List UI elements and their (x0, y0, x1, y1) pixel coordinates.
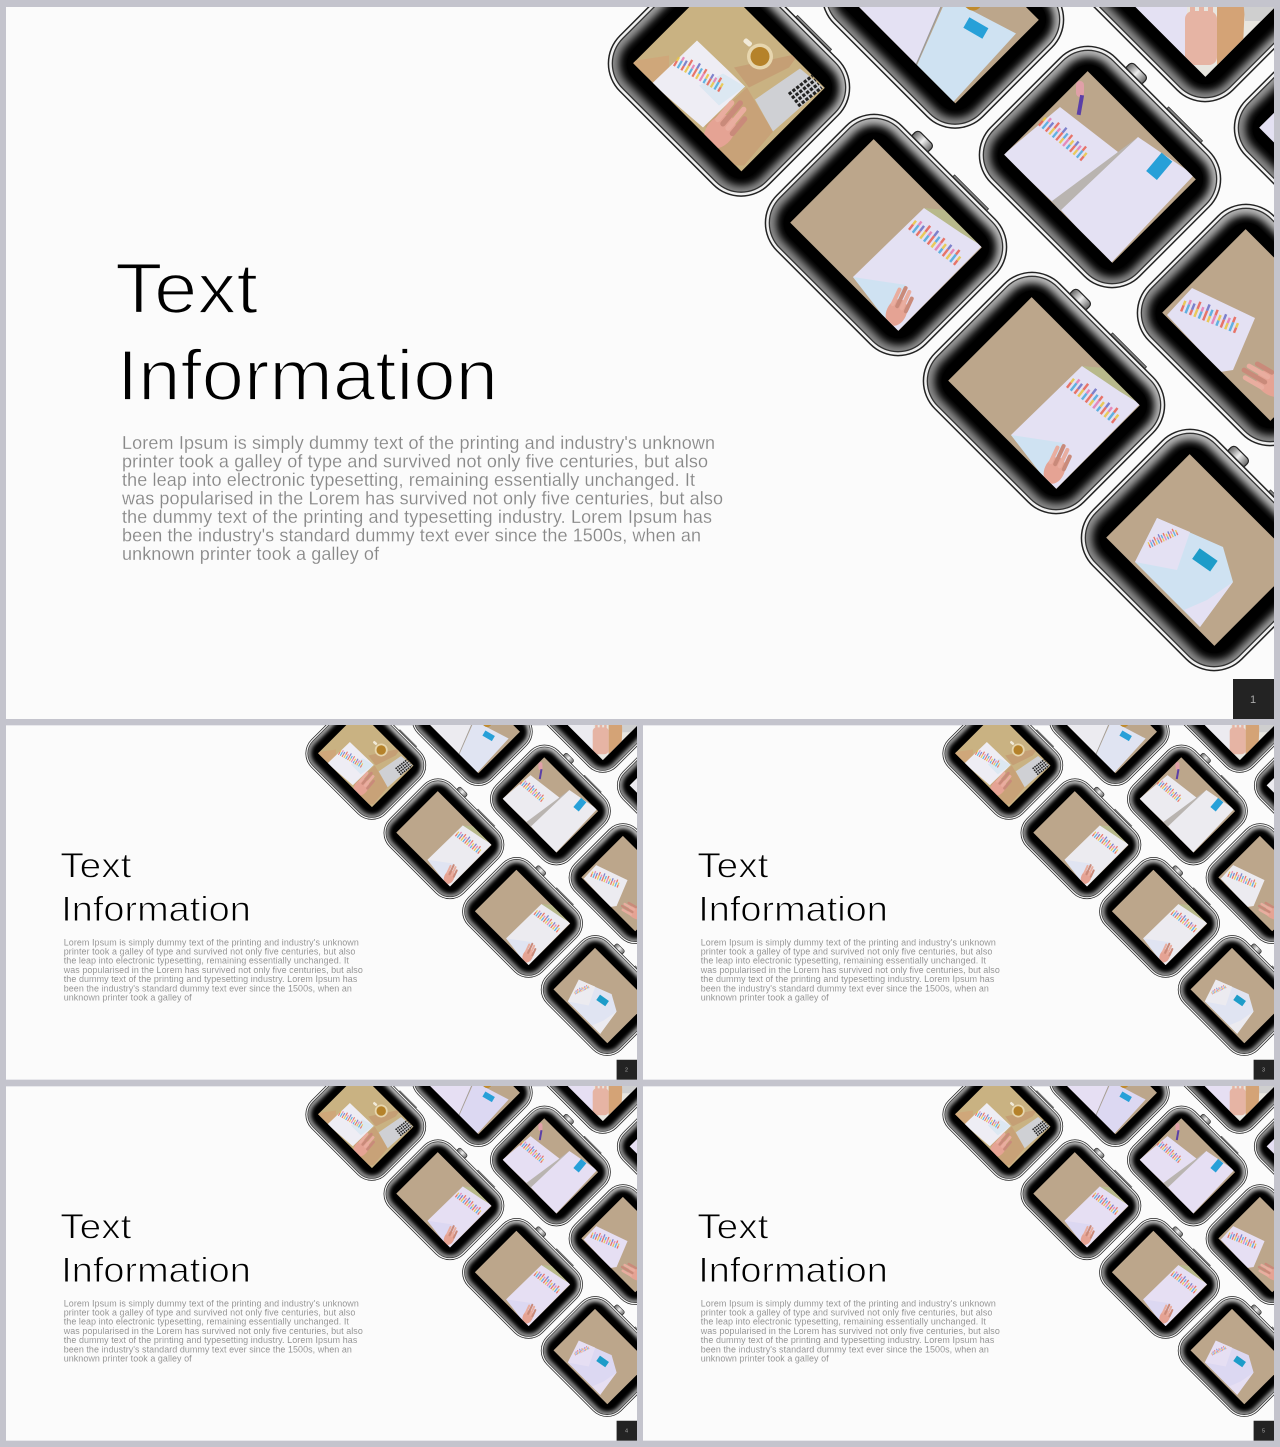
image: grid of tilted smartwatches (934, 641, 1280, 1064)
body text (700, 937, 1000, 1003)
page number: 5 (1262, 1429, 1265, 1435)
body text: the leap into electronic typesetting, remaining essentially unchanged. It (701, 1317, 986, 1327)
body text: the dummy text of the printing and typesetting industry. Lorem Ipsum has (701, 1335, 995, 1345)
image: grid of tilted smartwatches (934, 1002, 1280, 1425)
title: Information (117, 337, 498, 416)
body text: the dummy text of the printing and typesetting industry. Lorem Ipsum has (64, 974, 358, 984)
title: Information (61, 1251, 251, 1290)
body text: printer took a galley of type and survived not only five centuries, but also (64, 947, 355, 957)
body text (63, 937, 363, 1003)
body text: the leap into electronic typesetting, remaining essentially unchanged. It (701, 956, 986, 966)
body text: was popularised in the Lorem has survived not only five centuries, but also (63, 1326, 363, 1336)
body text: the dummy text of the printing and typesetting industry. Lorem Ipsum has (64, 1335, 358, 1345)
body text: was popularised in the Lorem has survived not only five centuries, but also (700, 965, 1000, 975)
body text: was popularised in the Lorem has survived not only five centuries, but also (700, 1326, 1000, 1336)
title (697, 847, 888, 929)
image: grid of tilted smartwatches (297, 641, 749, 1064)
body text: the dummy text of the printing and typesetting industry. Lorem Ipsum has (122, 507, 712, 527)
panel: slide 4 (6, 1086, 637, 1441)
body text (700, 1298, 1000, 1364)
body text (63, 1298, 363, 1364)
page number (617, 1060, 637, 1080)
body text: was popularised in the Lorem has survived not only five centuries, but also (63, 965, 363, 975)
body text: unknown printer took a galley of (701, 1354, 829, 1364)
title: Text (697, 847, 769, 886)
body text: the leap into electronic typesetting, remaining essentially unchanged. It (122, 470, 695, 490)
body text: unknown printer took a galley of (64, 993, 192, 1003)
title (60, 847, 251, 929)
page number: 3 (1262, 1068, 1265, 1074)
panel: slide 3 (643, 725, 1274, 1080)
page number (1254, 1060, 1274, 1080)
image: grid of tilted smartwatches (297, 1002, 749, 1425)
title: Information (698, 1251, 888, 1290)
title (697, 1208, 888, 1290)
page number: 1 (1250, 694, 1256, 706)
panel: slide 5 (643, 1086, 1274, 1441)
page number: 2 (625, 1068, 628, 1074)
body text: Lorem Ipsum is simply dummy text of the printing and industry's unknown (701, 937, 996, 947)
body text: been the industry's standard dummy text ever since the 1500s, when an (701, 1344, 989, 1354)
image: grid of tilted smartwatches (591, 0, 1280, 688)
title: Text (60, 1208, 132, 1247)
body text: Lorem Ipsum is simply dummy text of the printing and industry's unknown (64, 937, 359, 947)
body text (121, 433, 723, 564)
body text: unknown printer took a galley of (701, 993, 829, 1003)
body text: been the industry's standard dummy text ever since the 1500s, when an (122, 526, 701, 546)
body text: the leap into electronic typesetting, remaining essentially unchanged. It (64, 1317, 349, 1327)
body text: printer took a galley of type and survived not only five centuries, but also (122, 452, 708, 472)
body text: printer took a galley of type and survived not only five centuries, but also (701, 1308, 992, 1318)
title: Text (115, 250, 258, 329)
page number: 4 (625, 1429, 628, 1435)
body text: Lorem Ipsum is simply dummy text of the printing and industry's unknown (122, 433, 715, 453)
body text: been the industry's standard dummy text ever since the 1500s, when an (64, 1344, 352, 1354)
body text: unknown printer took a galley of (122, 544, 380, 564)
body text: unknown printer took a galley of (64, 1354, 192, 1364)
body text: was popularised in the Lorem has survived not only five centuries, but also (121, 488, 723, 508)
body text: printer took a galley of type and survived not only five centuries, but also (64, 1308, 355, 1318)
panel: main slide (6, 7, 1274, 719)
body text: the dummy text of the printing and typesetting industry. Lorem Ipsum has (701, 974, 995, 984)
body text: Lorem Ipsum is simply dummy text of the printing and industry's unknown (64, 1298, 359, 1308)
page number (1254, 1421, 1274, 1441)
body text: Lorem Ipsum is simply dummy text of the printing and industry's unknown (701, 1298, 996, 1308)
title: Information (698, 890, 888, 929)
title (60, 1208, 251, 1290)
body text: been the industry's standard dummy text ever since the 1500s, when an (701, 983, 989, 993)
title (115, 250, 498, 416)
body text: the leap into electronic typesetting, remaining essentially unchanged. It (64, 956, 349, 966)
panel: slide 2 (6, 725, 637, 1080)
body text: printer took a galley of type and survived not only five centuries, but also (701, 947, 992, 957)
page number (1233, 679, 1274, 719)
page number (617, 1421, 637, 1441)
title: Information (61, 890, 251, 929)
title: Text (60, 847, 132, 886)
body text: been the industry's standard dummy text ever since the 1500s, when an (64, 983, 352, 993)
title: Text (697, 1208, 769, 1247)
